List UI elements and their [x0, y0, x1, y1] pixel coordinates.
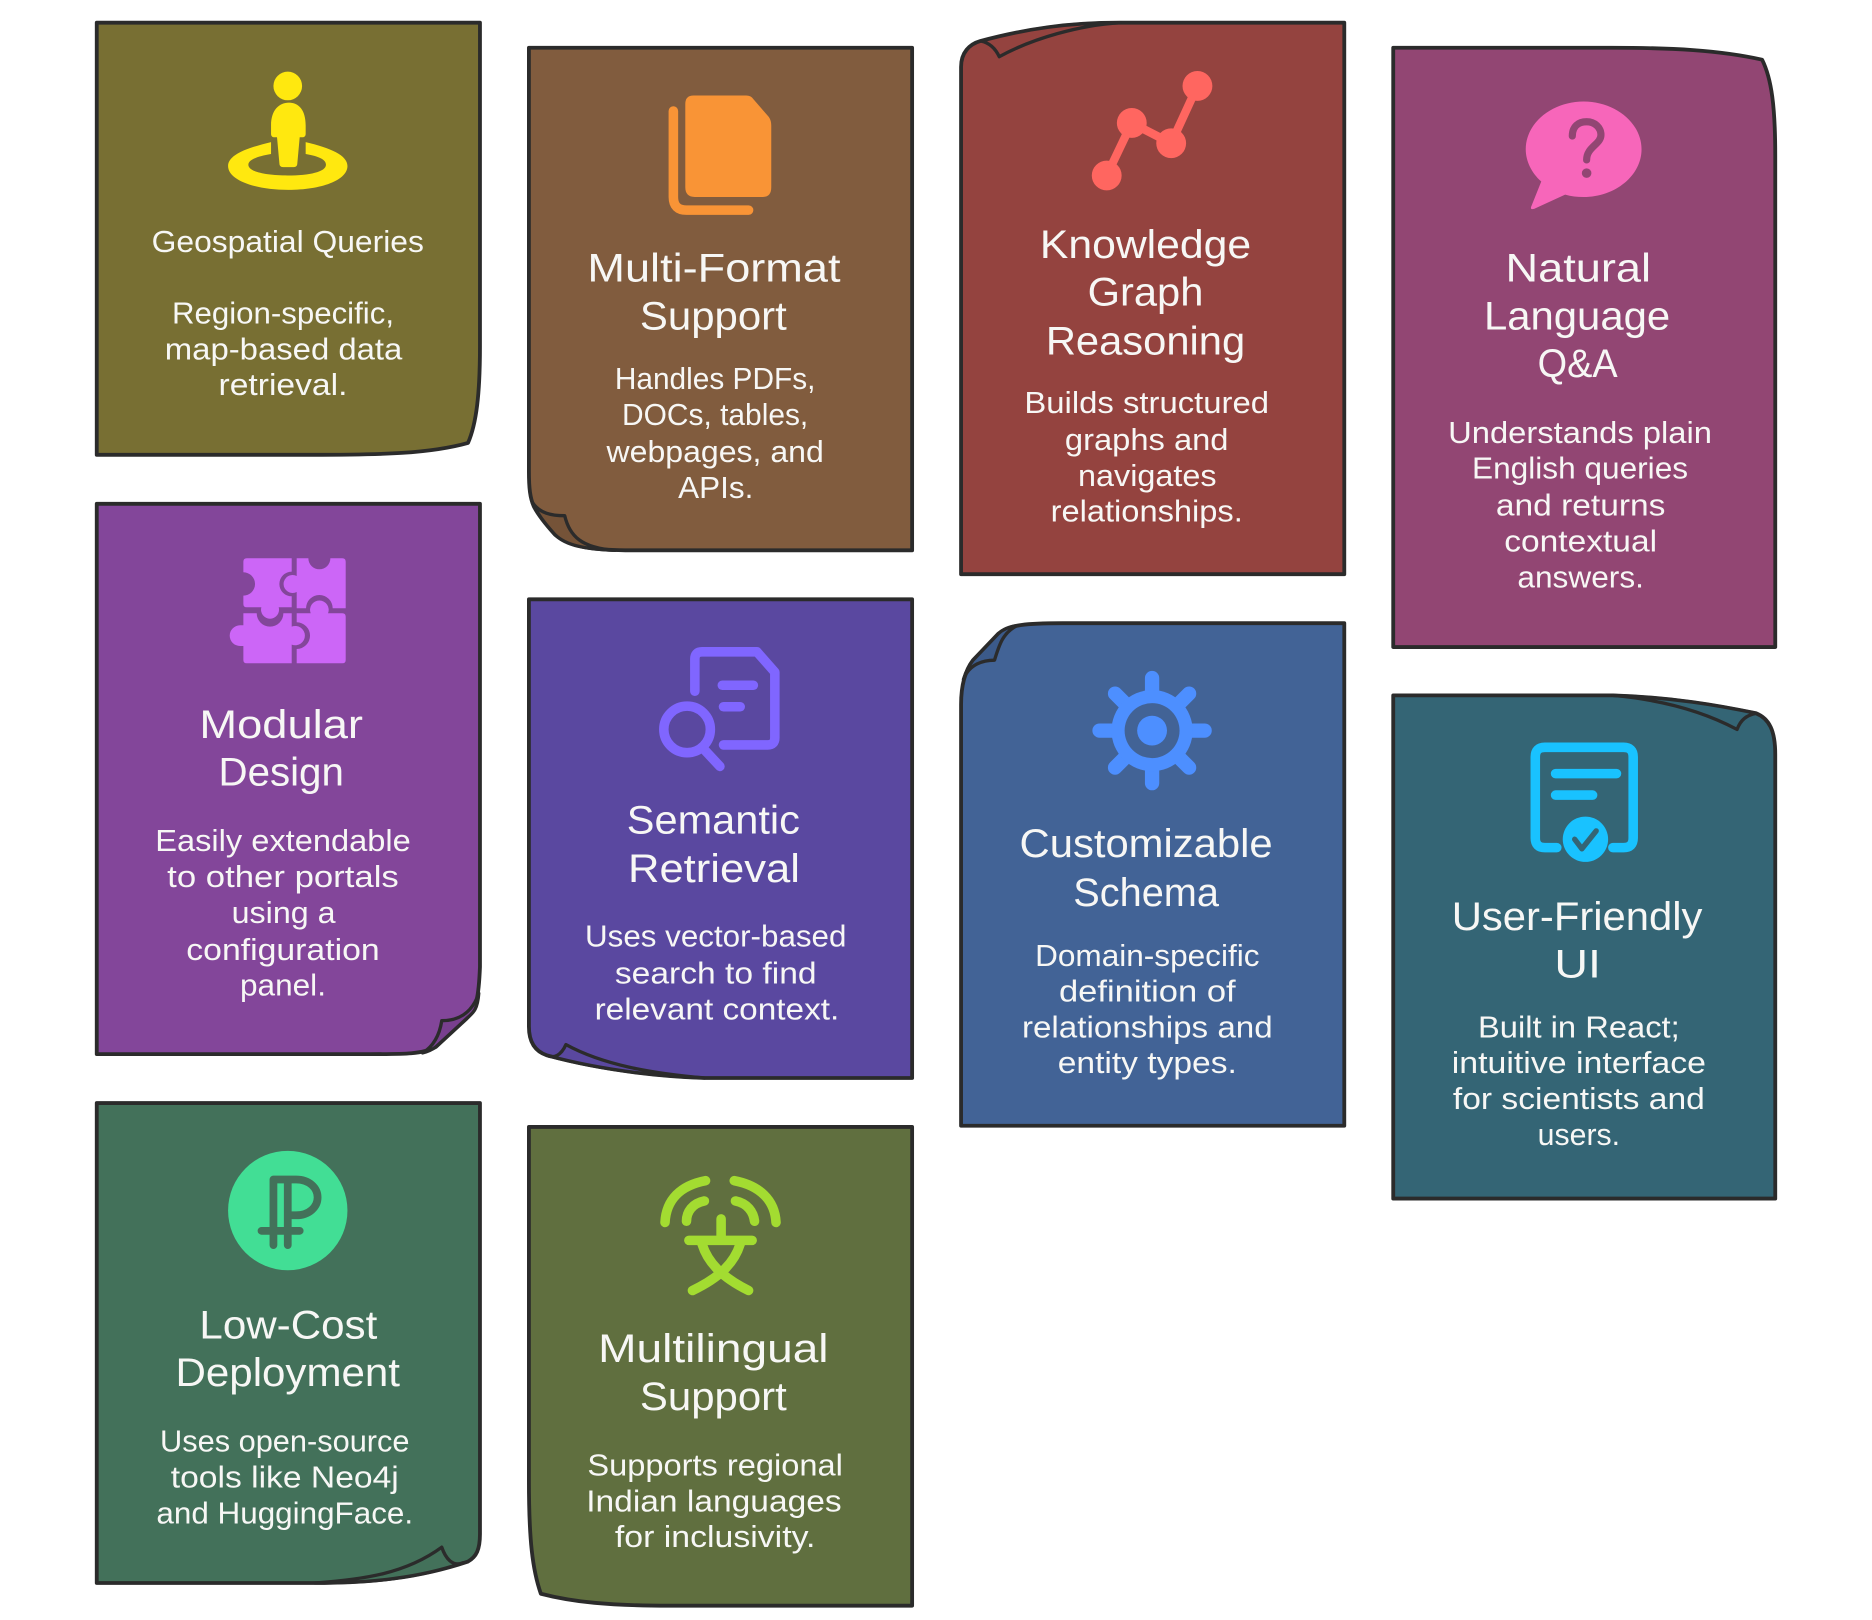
panel: User-Friendly UI: [1393, 695, 1775, 1199]
panel: Natural Language Q&A: [1393, 48, 1775, 647]
heading: Language: [1484, 294, 1670, 338]
heading: Retrieval: [628, 847, 800, 891]
description: Supports regional: [587, 1449, 843, 1483]
icon: person on map marker: [228, 72, 347, 190]
heading: Semantic: [627, 798, 800, 842]
icon: certified document: [1535, 747, 1633, 862]
heading: Graph: [1088, 271, 1203, 315]
heading: Q&A: [1538, 342, 1618, 386]
description: webpages, and: [605, 435, 824, 469]
heading: Low-Cost: [199, 1303, 377, 1347]
description: DOCs, tables,: [622, 398, 808, 432]
heading: Modular: [199, 703, 363, 747]
description: definition of: [1059, 975, 1236, 1009]
heading: UI: [1554, 943, 1601, 987]
description: answers.: [1517, 560, 1644, 594]
description: for inclusivity.: [615, 1520, 815, 1554]
description: Uses open-source: [160, 1425, 410, 1459]
description: [165, 297, 402, 402]
description: Domain-specific: [1035, 939, 1260, 973]
panel: Knowledge Graph Reasoning: [961, 23, 1344, 574]
description: [1448, 416, 1712, 594]
heading: Geospatial Queries: [152, 225, 424, 259]
panel: Low-Cost Deployment: [97, 1103, 480, 1583]
page curl: [963, 626, 1017, 679]
icon: gear: [1100, 678, 1205, 783]
description: intuitive interface: [1452, 1046, 1706, 1080]
description: graphs and: [1065, 423, 1228, 457]
description: relevant context.: [595, 993, 839, 1027]
heading: [587, 247, 841, 338]
heading: [176, 1303, 400, 1395]
description: Indian languages: [586, 1484, 842, 1518]
panel: Semantic Retrieval: [529, 599, 912, 1078]
description: Understands plain: [1448, 416, 1712, 450]
card shape: [1393, 48, 1775, 647]
description: tools like Neo4j: [171, 1460, 399, 1494]
description: relationships.: [1051, 495, 1243, 529]
heading: [1452, 895, 1703, 987]
card shape: [1393, 695, 1775, 1199]
icon: document search: [664, 652, 775, 766]
heading: Natural: [1505, 247, 1651, 291]
heading: Support: [640, 294, 787, 338]
card shape: [97, 504, 480, 1054]
heading: [1020, 822, 1273, 915]
icon: language broadcast: [665, 1181, 776, 1291]
description: Builds structured: [1024, 386, 1269, 420]
card shape: [529, 1127, 912, 1606]
description: and HuggingFace.: [156, 1496, 413, 1530]
description: [1452, 1010, 1706, 1152]
panel: Multi-Format Support: [529, 48, 912, 550]
panel: Customizable Schema: [961, 623, 1344, 1126]
description: retrieval.: [219, 368, 347, 402]
page curl: [547, 1045, 704, 1078]
icon: ruble coin: [228, 1151, 347, 1270]
heading: [1040, 223, 1251, 364]
icon: question bubble: [1526, 101, 1642, 209]
description: [155, 824, 411, 1003]
heading: Deployment: [176, 1351, 400, 1395]
card shape: [97, 1103, 480, 1583]
description: relationships and: [1022, 1010, 1273, 1044]
page curl: [423, 993, 479, 1053]
heading: Reasoning: [1046, 320, 1245, 364]
description: navigates: [1078, 459, 1217, 493]
description: configuration: [186, 933, 380, 967]
description: [585, 920, 846, 1027]
card shape: [529, 599, 912, 1078]
description: entity types.: [1058, 1046, 1237, 1080]
page curl: [532, 503, 615, 550]
heading: Knowledge: [1040, 223, 1251, 267]
description: search to find: [615, 957, 817, 991]
card shape: [97, 23, 480, 455]
page curl: [1613, 695, 1756, 729]
description: [156, 1425, 413, 1530]
heading: [598, 1327, 829, 1419]
heading: Design: [219, 751, 344, 795]
heading: [1484, 247, 1670, 386]
heading: [199, 703, 363, 795]
description: users.: [1538, 1118, 1620, 1152]
card shape: [961, 23, 1344, 574]
description: to other portals: [167, 860, 399, 894]
heading: Multi-Format: [587, 247, 841, 291]
description: [586, 1449, 843, 1554]
description: Region-specific,: [172, 297, 394, 331]
icon: graph line: [1092, 71, 1212, 190]
description: [605, 362, 824, 505]
description: using a: [232, 896, 336, 930]
description: and returns: [1496, 489, 1665, 523]
description: Uses vector-based: [585, 920, 846, 954]
description: English queries: [1472, 452, 1688, 486]
card shape: [529, 48, 912, 550]
heading: Customizable: [1020, 822, 1273, 866]
description: map-based data: [165, 332, 402, 366]
description: contextual: [1504, 525, 1657, 559]
panel: Multilingual Support: [529, 1127, 912, 1606]
heading: User-Friendly: [1452, 895, 1703, 939]
heading: Multilingual: [598, 1327, 829, 1371]
description: Handles PDFs,: [615, 362, 815, 396]
panel: Modular Design: [97, 504, 480, 1054]
description: for scientists and: [1453, 1082, 1705, 1116]
page curl: [315, 1547, 463, 1583]
description: [1022, 939, 1273, 1080]
heading: [627, 798, 800, 891]
page curl: [981, 23, 1120, 57]
icon: puzzle pieces: [230, 558, 346, 663]
heading: Support: [640, 1375, 787, 1419]
description: APIs.: [678, 471, 753, 505]
description: Easily extendable: [155, 824, 411, 858]
heading: Schema: [1073, 871, 1219, 915]
icon: documents: [673, 96, 771, 210]
description: [1024, 386, 1269, 529]
panel: Geospatial Queries: [97, 23, 480, 455]
card shape: [961, 623, 1344, 1126]
description: panel.: [240, 969, 326, 1003]
description: Built in React;: [1478, 1010, 1680, 1044]
